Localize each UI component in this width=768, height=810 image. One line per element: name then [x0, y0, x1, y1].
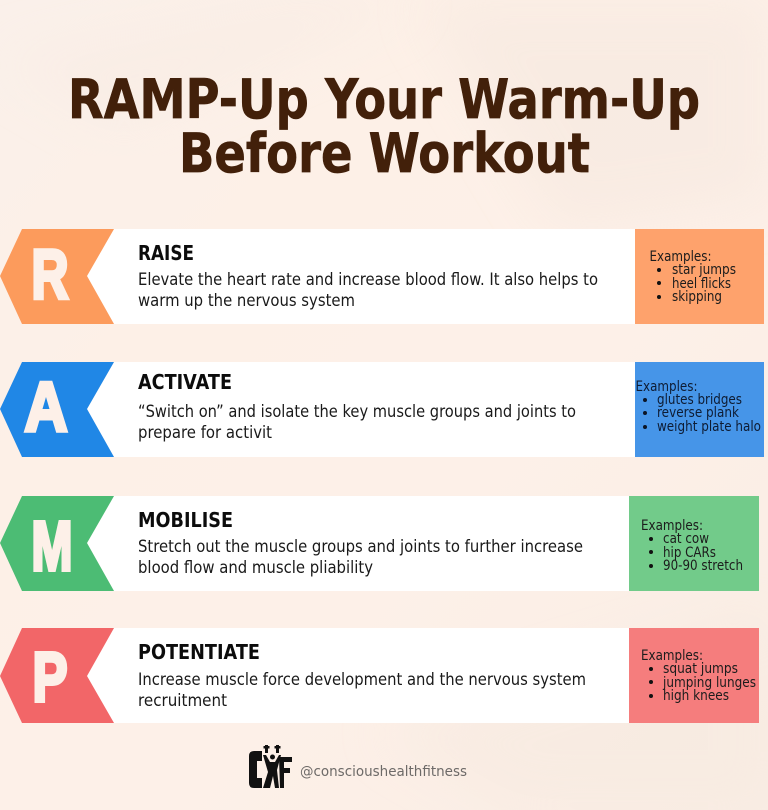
description: potentiate	[138, 670, 586, 710]
description: activate: “Switch on” and isolate the key muscle groups and joints to	[138, 402, 576, 421]
examples box: activate: glutes bridges	[657, 392, 742, 408]
examples box: raise: star jumps	[672, 262, 736, 278]
heading: raise: RAISE	[138, 241, 194, 265]
description: raise	[138, 270, 598, 310]
letter arrow: A	[0, 362, 114, 457]
examples box: activate: Examples:	[636, 379, 698, 395]
white card: raise	[87, 229, 636, 324]
description: activate: prepare for activit	[138, 423, 272, 442]
panel: activate	[0, 362, 764, 457]
footer: logo and handle	[249, 745, 467, 788]
examples box: raise: skipping	[672, 289, 722, 305]
title: Before Workout	[179, 122, 590, 185]
examples box: activate	[635, 362, 764, 457]
description: mobilise	[138, 537, 583, 577]
handle: @conscioushealthfitness	[300, 764, 467, 780]
panel: potentiate	[0, 628, 759, 723]
white card: potentiate	[87, 628, 630, 723]
examples box: mobilise: Examples:	[641, 518, 703, 534]
examples box: potentiate: jumping lunges	[662, 675, 756, 691]
examples box: potentiate	[629, 628, 759, 723]
description: raise: warm up the nervous system	[138, 291, 355, 310]
examples box: raise: heel flicks	[672, 276, 731, 292]
examples box: potentiate: Examples:	[641, 648, 703, 664]
examples box: mobilise: cat cow	[663, 531, 709, 547]
examples box: raise: Examples:	[650, 249, 712, 265]
letter arrow: P: P	[32, 638, 68, 716]
white card: mobilise	[87, 496, 630, 591]
letter arrow: P	[0, 628, 114, 723]
white card: activate	[87, 362, 636, 457]
examples box: raise	[635, 229, 764, 324]
heading: mobilise: MOBILISE	[138, 508, 233, 532]
examples box: potentiate: high knees	[663, 688, 729, 704]
description: potentiate: Increase muscle force development and the nervous system	[138, 670, 586, 689]
panel: raise	[0, 229, 764, 324]
examples box: mobilise: hip CARs	[663, 545, 716, 561]
description: mobilise: Stretch out the muscle groups and joints to further increase	[138, 537, 583, 556]
description: mobilise: blood flow and muscle pliability	[138, 558, 373, 577]
letter arrow: A: A	[24, 368, 68, 446]
heading: activate: ACTIVATE	[138, 370, 232, 394]
description: activate	[138, 402, 576, 442]
heading: potentiate: POTENTIATE	[138, 640, 260, 664]
examples box: mobilise: 90-90 stretch	[663, 558, 743, 574]
examples box: activate: reverse plank	[657, 405, 740, 421]
description: potentiate: recruitment	[138, 691, 227, 710]
letter arrow: R: R	[32, 235, 68, 313]
title	[68, 68, 700, 185]
letter arrow: M	[0, 496, 114, 591]
letter arrow: M: M	[32, 507, 72, 585]
description: raise: Elevate the heart rate and increase blood flow. It also helps to	[138, 270, 598, 289]
icon: CHF logo	[249, 745, 292, 788]
examples box: potentiate: squat jumps	[663, 661, 738, 677]
letter arrow: R	[0, 229, 114, 324]
examples box: mobilise	[629, 496, 759, 591]
panel: mobilise	[0, 496, 759, 591]
